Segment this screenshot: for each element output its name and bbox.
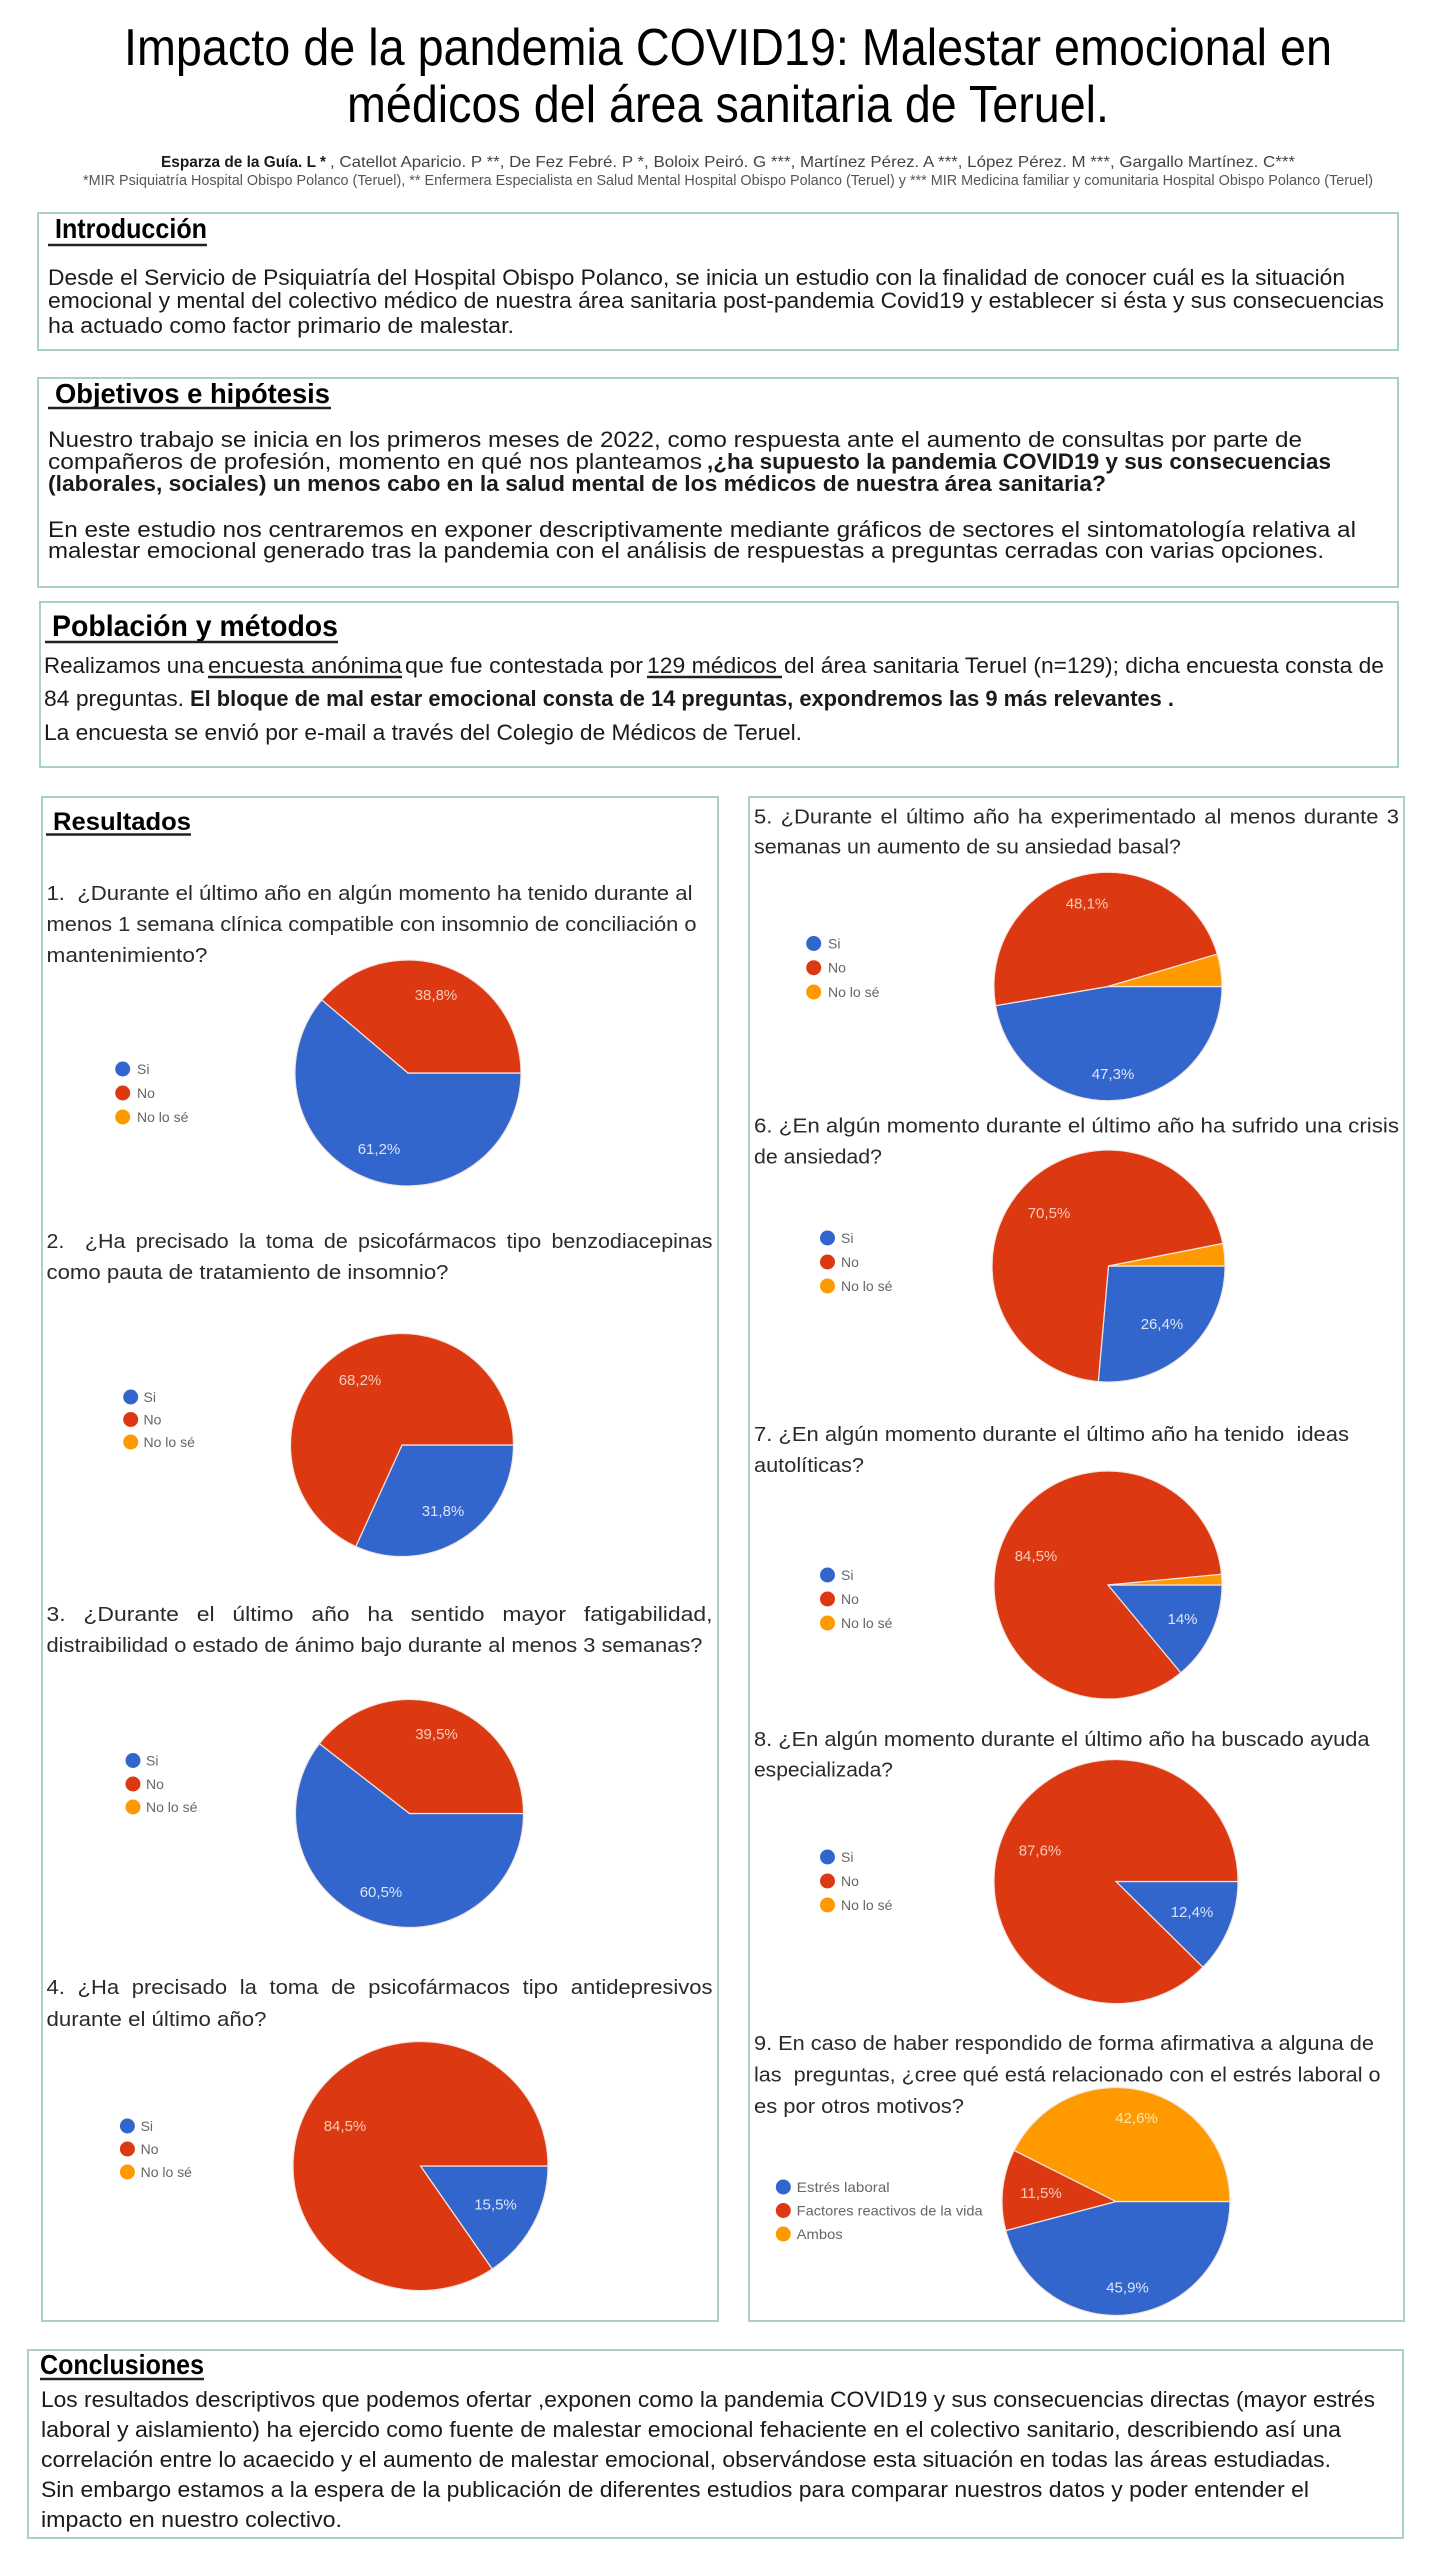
legend: question 7 [820,1567,893,1631]
legend: question 1: Si [137,1061,149,1077]
pie chart: question 2: 68,2% [339,1372,381,1389]
legend: question 6: Si [841,1230,853,1246]
legend: question 5: No lo sé [828,984,880,1000]
question 3 [46,1604,712,1657]
question 6 [754,1116,1399,1168]
question 1 [46,883,696,967]
legend: question 6: No lo sé [841,1278,893,1294]
title: médicos del área sanitaria de Teruel. [347,76,1109,134]
pie chart: question 5: 48,1% [1066,896,1108,912]
legend: question 1 [115,1061,189,1125]
question 5 [754,806,1399,858]
text: población: 84 preguntas. [44,686,184,711]
text: objetivos [48,427,1356,563]
question 1: 1. ¿Durante el último año en algún momento ha tenido durante al [46,883,692,905]
text: conclusiones [41,2387,1375,2532]
authors: , Catellot Aparicio. P **, De Fez Febré. P *, Boloix Peiró. G ***, Martínez Pérez. A ***, López Pérez. M ***, Gargallo Martínez. C*** [330,154,1295,171]
legend: question 9: Ambos [797,2226,843,2242]
pie chart: question 8: 12,4% [1171,1904,1213,1921]
text: población [44,653,1384,745]
text: objetivos: En este estudio nos centraremos en exponer descriptivamente mediante gráficos de sectores el sintomatología relativa al [48,517,1356,542]
pie chart: question 4: 84,5% [324,2118,366,2135]
legend: question 7: No lo sé [841,1615,893,1631]
text: objetivos: ,¿ha supuesto la pandemia COVID19 y sus consecuencias [707,449,1331,474]
text: población: La encuesta se envió por e-mail a través del Colegio de Médicos de Teruel. [44,720,802,745]
question 8: especializada? [754,1760,893,1782]
question 5: 5. ¿Durante el último año ha experimentado al menos durante 3 [754,806,1399,828]
question 9: las preguntas, ¿cree qué está relacionado con el estrés laboral o [754,2064,1380,2086]
question 9: es por otros motivos? [754,2096,964,2118]
title [124,19,1332,134]
question 6: de ansiedad? [754,1146,882,1168]
panel: introducción [38,213,1398,350]
pie chart: question 8 [994,1760,1238,2004]
legend: question 7: Si [841,1567,853,1583]
pie chart: question 1: 38,8% [415,987,457,1004]
pie chart: question 6: 26,4% [1141,1316,1183,1333]
pie chart: question 3: 60,5% [360,1884,402,1901]
pie chart: question 9: 42,6% [1115,2110,1158,2127]
pie chart: question 9: 11,5% [1020,2185,1062,2202]
legend: question 2: No lo sé [144,1434,195,1450]
question 1: mantenimiento? [46,945,208,967]
panel: población y métodos [40,602,1398,767]
text: objetivos: compañeros de profesión, momento en qué nos planteamos [48,449,702,474]
question 8: 8. ¿En algún momento durante el último año ha buscado ayuda [754,1729,1370,1751]
question 1: menos 1 semana clínica compatible con insomnio de conciliación o [46,914,696,936]
legend: question 6: No [841,1254,859,1270]
pie chart: question 9: 45,9% [1106,2280,1149,2296]
text: introducción: ha actuado como factor primario de malestar. [48,313,514,338]
legend: question 9 [776,2179,983,2242]
pie chart: question 2: 31,8% [422,1503,464,1520]
legend: question 8 [820,1849,893,1913]
text: conclusiones: laboral y aislamiento) ha ejercido como fuente de malestar emocional fehaciente en el colectivo sanitario, describiendo así una [41,2417,1342,2442]
pie chart: question 6: 70,5% [1028,1205,1070,1222]
text: objetivos: Nuestro trabajo se inicia en los primeros meses de 2022, como respuesta ante el aumento de consultas por parte de [48,427,1302,452]
title: Impacto de la pandemia COVID19: Malestar emocional en [124,19,1332,77]
text: población: 129 médicos [647,653,777,678]
pie chart: question 1: 61,2% [358,1141,400,1158]
question 4: durante el último año? [46,2009,266,2031]
legend: question 8: Si [841,1849,853,1865]
question 3: 3. ¿Durante el último año ha sentido mayor fatigabilidad, [46,1604,712,1626]
question 7 [754,1424,1349,1477]
pie chart: question 5 [994,872,1222,1101]
legend: question 4: No [141,2141,159,2157]
legend: question 6 [820,1230,893,1294]
question 2: 2. ¿Ha precisado la toma de psicofármacos tipo benzodiacepinas [46,1231,712,1253]
panel: objetivos e hipótesis [38,378,1398,587]
pie chart: question 7: 14% [1167,1611,1198,1628]
heading: objetivos: Objetivos e hipótesis [55,378,330,409]
question 4 [46,1977,713,2031]
legend: question 3 [126,1752,198,1815]
legend: question 5 [806,936,880,1000]
pie chart: question 5: 47,3% [1092,1066,1134,1083]
authors: Esparza de la Guía. L * [161,154,327,171]
question 5: semanas un aumento de su ansiedad basal? [754,836,1181,858]
text: introducción [48,265,1384,338]
panel: conclusiones [28,2349,1403,2538]
pie chart: question 8: 87,6% [1019,1842,1061,1860]
text: objetivos: malestar emocional generado tras la pandemia con el análisis de respuestas a preguntas cerradas con varias opciones. [48,538,1324,563]
text: conclusiones: impacto en nuestro colectivo. [41,2507,342,2532]
text: conclusiones: Sin embargo estamos a la espera de la publicación de diferentes estudios para comparar nuestros datos y poder entender el [41,2477,1309,2502]
question 2 [46,1231,712,1284]
legend: question 7: No [841,1591,859,1607]
text: población: Realizamos una [44,653,205,678]
legend: question 4: No lo sé [141,2164,192,2180]
heading: conclusiones: Conclusiones [40,2349,204,2380]
question 2: como pauta de tratamiento de insomnio? [46,1262,448,1284]
legend: question 3: No [146,1776,164,1792]
question 9 [754,2033,1380,2118]
legend: question 2: No [144,1412,162,1428]
heading: introducción: Introducción [55,213,207,244]
heading: resultados: Resultados [53,808,191,836]
question 6: 6. ¿En algún momento durante el último año ha sufrido una crisis [754,1116,1399,1138]
pie chart: question 4: 15,5% [474,2196,517,2214]
legend: question 3: No lo sé [146,1799,198,1815]
pie chart: question 7 [994,1471,1222,1699]
text: población: del área sanitaria Teruel (n=129); dicha encuesta consta de [784,653,1384,678]
question 4: 4. ¿Ha precisado la toma de psicofármacos tipo antidepresivos [46,1977,713,1999]
legend: question 5: Si [828,936,840,952]
text: introducción: emocional y mental del colectivo médico de nuestra área sanitaria post-pandemia Covid19 y establecer si ésta y sus consecuencias [48,288,1384,313]
legend: question 8: No [841,1873,859,1889]
legend: question 2: Si [144,1389,156,1405]
heading: población: Población y métodos [52,610,338,643]
question 9: 9. En caso de haber respondido de forma afirmativa a alguna de [754,2033,1374,2055]
pie chart: question 3 [296,1699,524,1927]
pie chart: question 3: 39,5% [415,1726,458,1743]
panel: resultados izquierda [42,797,718,2321]
question 8 [754,1729,1370,1782]
question 3: distraibilidad o estado de ánimo bajo durante al menos 3 semanas? [46,1635,702,1657]
text: población: El bloque de mal estar emocional consta de 14 preguntas, expondremos las 9 más relevantes . [190,686,1174,711]
question 7: autolíticas? [754,1455,864,1477]
text: conclusiones: correlación entre lo acaecido y el aumento de malestar emocional, observándose esta situación en todas las áreas estudiadas. [41,2447,1331,2472]
legend: question 5: No [828,960,846,976]
legend: question 4 [120,2118,192,2180]
pie chart: question 4 [293,2042,548,2291]
legend: question 2 [123,1389,195,1450]
legend: question 9: Factores reactivos de la vida [797,2202,983,2218]
affiliations: *MIR Psiquiatría Hospital Obispo Polanco (Teruel), ** Enfermera Especialista en Salud Mental Hospital Obispo Polanco (Teruel) y *** MIR Medicina familiar y comunitaria Hospital Obispo Polanco (Teruel) [83,172,1373,189]
text: introducción: Desde el Servicio de Psiquiatría del Hospital Obispo Polanco, se inicia un estudio con la finalidad de conocer cuál es la situación [48,265,1345,290]
text: población: encuesta anónima [208,653,403,678]
text: conclusiones: Los resultados descriptivos que podemos ofertar ,exponen como la pandemia COVID19 y sus consecuencias directas (mayor estrés [41,2387,1375,2412]
pie chart: question 6 [992,1150,1225,1382]
legend: question 1: No [137,1085,155,1101]
legend: question 8: No lo sé [841,1897,893,1913]
pie chart: question 7: 84,5% [1015,1548,1057,1565]
pie chart: question 2 [291,1334,514,1557]
text: población: que fue contestada por [405,653,643,678]
panel: resultados derecha [749,797,1404,2321]
legend: question 4: Si [141,2118,153,2134]
text: objetivos: (laborales, sociales) un menos cabo en la salud mental de los médicos de nuestra área sanitaria? [48,471,1106,496]
legend: question 9: Estrés laboral [797,2179,890,2195]
pie chart: question 1 [295,960,521,1186]
question 7: 7. ¿En algún momento durante el último año ha tenido ideas [754,1424,1349,1446]
legend: question 1: No lo sé [137,1109,189,1125]
legend: question 3: Si [146,1752,158,1768]
pie chart: question 9 [1002,2088,1230,2315]
